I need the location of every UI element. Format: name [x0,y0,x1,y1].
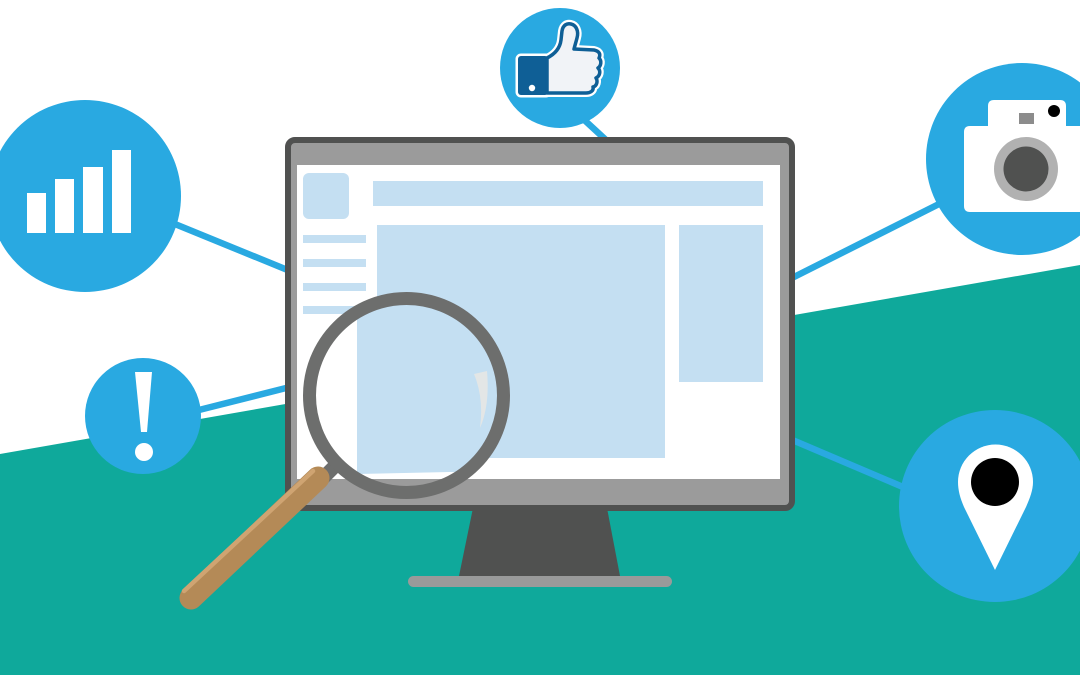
header bar [373,181,763,206]
icon: exclamation mark [85,358,201,474]
icon: camera [926,63,1080,255]
neck [322,464,337,479]
monitor [288,140,792,508]
ring [310,298,504,492]
icon: bar chart [0,100,181,292]
lens view [357,310,472,474]
avatar block [303,173,349,219]
handle [191,478,318,598]
right column block [679,225,763,382]
sidebar lines [303,235,366,314]
magnifying glass [184,290,520,598]
monitor stand [408,508,672,587]
main content block [377,225,665,458]
icon: thumbs up [500,8,620,128]
icon: map pin [899,410,1080,602]
connector lines [170,116,945,490]
lens glare [474,371,488,428]
screen [297,165,780,479]
background: green ground [0,265,1080,675]
